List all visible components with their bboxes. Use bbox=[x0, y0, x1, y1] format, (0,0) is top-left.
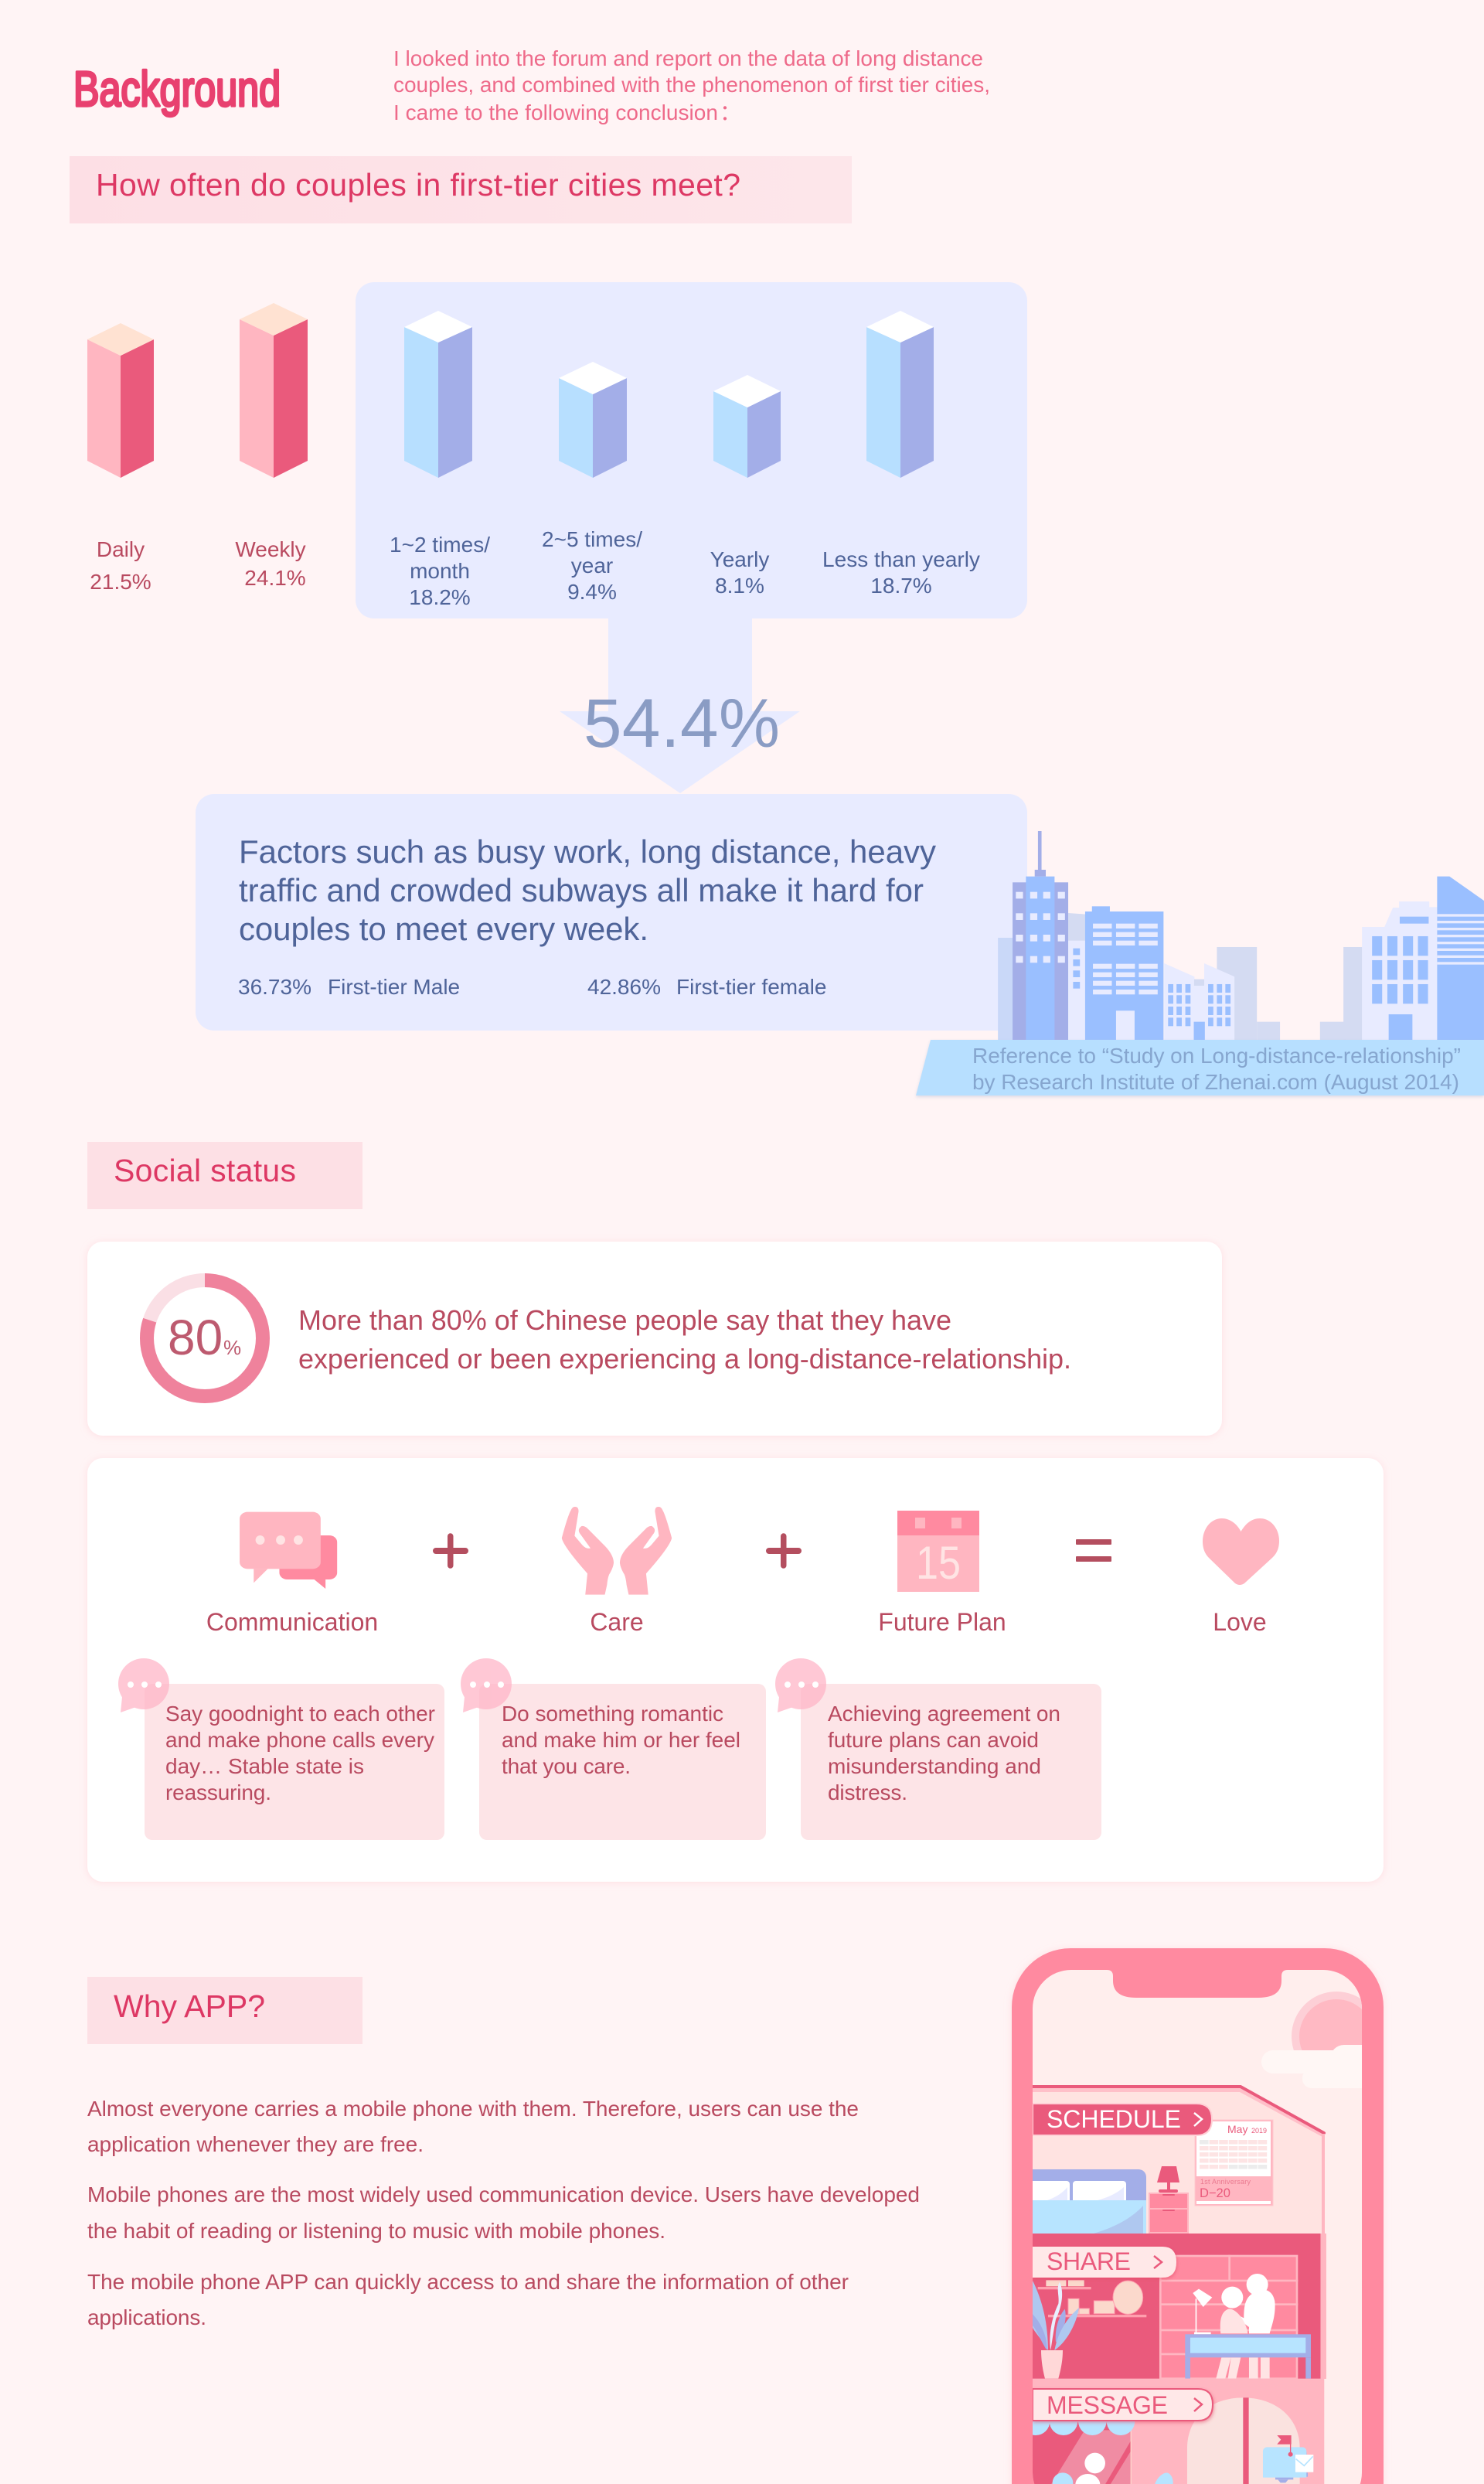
note: communication: reassuring. bbox=[165, 1780, 271, 1804]
bar: Less than yearly bbox=[866, 311, 934, 478]
bar labels: Daily bbox=[97, 537, 145, 561]
note: communication: Say goodnight to each other bbox=[165, 1702, 435, 1726]
shelves bbox=[1038, 2280, 1146, 2317]
desk lamp bbox=[1193, 2289, 1212, 2334]
heading: Why APP? bbox=[87, 1977, 362, 2044]
text block: why app reasons bbox=[87, 2097, 920, 2329]
donut chart: 80% bbox=[147, 1280, 263, 1396]
wall calendar: D−20 bbox=[1200, 2186, 1230, 2200]
label: MESSAGE: MESSAGE bbox=[1047, 2391, 1168, 2419]
label: SCHEDULE bbox=[1033, 2104, 1212, 2135]
gender stats: 36.73% bbox=[238, 975, 311, 999]
house first floor wall bbox=[1033, 2085, 1326, 2234]
window grid bbox=[1159, 2255, 1298, 2379]
note: care: that you care. bbox=[502, 1754, 631, 1778]
icon: plus bbox=[766, 1533, 802, 1569]
phone screen bbox=[1033, 1970, 1362, 2484]
illustration: phone bbox=[1012, 1948, 1395, 2484]
bar labels: 18.7% bbox=[870, 574, 932, 598]
formula labels: Future Plan bbox=[878, 1608, 1006, 1636]
label: SHARE bbox=[1033, 2247, 1176, 2278]
statement text bbox=[298, 1304, 1071, 1375]
bar: Daily bbox=[87, 323, 154, 478]
wall calendar bbox=[1195, 2120, 1273, 2206]
note: future plan: misunderstanding and bbox=[828, 1754, 1041, 1778]
formula labels bbox=[206, 1608, 1267, 1636]
formula labels: Communication bbox=[206, 1608, 378, 1636]
couple bbox=[1216, 2274, 1275, 2379]
intro text block: I looked into the forum and report on the data of long distance bbox=[393, 46, 983, 70]
bar labels: 21.5% bbox=[90, 570, 151, 594]
note: future plan: future plans can avoid bbox=[828, 1728, 1039, 1752]
lamp and nightstand bbox=[1149, 2166, 1188, 2233]
factors text: Factors such as busy work, long distance, heavy bbox=[239, 833, 936, 870]
icon: equals bbox=[1076, 1539, 1111, 1562]
heading: How often do couples meet: How often do couples in first-tier cities meet? bbox=[96, 167, 740, 203]
text block: why app reasons: the habit of reading or listening to music with mobile phones. bbox=[87, 2219, 665, 2243]
desk bbox=[1185, 2334, 1311, 2379]
calendar date grid bbox=[1200, 2140, 1267, 2169]
bar labels: month bbox=[410, 559, 470, 583]
bar: Weekly bbox=[240, 303, 308, 478]
reference strip bbox=[916, 1040, 1484, 1095]
panel: factors bbox=[196, 794, 1027, 1031]
formula labels: Love bbox=[1213, 1608, 1267, 1636]
icon: caring hands bbox=[562, 1507, 672, 1595]
note: care: and make him or her feel bbox=[502, 1728, 740, 1752]
bar chart: meeting frequency bbox=[87, 303, 934, 478]
statement text: experienced or been experiencing a long-distance-relationship. bbox=[298, 1343, 1071, 1375]
plant bbox=[1033, 2281, 1079, 2379]
wall calendar: 1st Anniversary bbox=[1200, 2178, 1251, 2186]
statement text: More than 80% of Chinese people say that they have bbox=[298, 1304, 951, 1336]
factors text: traffic and crowded subways all make it hard for bbox=[239, 872, 924, 908]
icon: plus bbox=[433, 1533, 468, 1569]
mailbox bbox=[1263, 2435, 1313, 2482]
heading: Why APP?: Why APP? bbox=[114, 1988, 265, 2024]
shop window with figure bbox=[1033, 2421, 1173, 2484]
sun and clouds bbox=[1261, 1992, 1362, 2088]
intro text block: couples, and combined with the phenomenon of first tier cities, bbox=[393, 73, 990, 97]
panel: love formula bbox=[87, 1458, 1384, 1882]
phone notch bbox=[1107, 1970, 1288, 1998]
bar: 2~5 times/year bbox=[559, 362, 627, 478]
note: communication: and make phone calls every bbox=[165, 1728, 434, 1752]
panel: blue frequency panel with arrow bbox=[356, 282, 1027, 793]
label: MESSAGE bbox=[1033, 2389, 1213, 2421]
bar labels: 2~5 times/ bbox=[542, 527, 642, 551]
wall calendar: May bbox=[1227, 2123, 1247, 2135]
text block: why app reasons: applications. bbox=[87, 2305, 206, 2329]
intro text block: I came to the following conclusion bbox=[393, 101, 718, 124]
factors text: couples to meet every week. bbox=[239, 911, 648, 947]
title: Background: Background bbox=[73, 61, 281, 117]
bar labels: 24.1% bbox=[244, 566, 306, 590]
donut chart: 80%: % bbox=[223, 1336, 241, 1359]
bar labels: Weekly bbox=[235, 537, 306, 561]
note: future plan: Achieving agreement on bbox=[828, 1702, 1060, 1726]
icon: calendar 15: 15 bbox=[916, 1537, 961, 1589]
intro text block bbox=[393, 46, 990, 124]
note: future plan bbox=[775, 1658, 1101, 1840]
panel: 80 percent card bbox=[87, 1242, 1222, 1436]
donut chart: 80%: 80 bbox=[168, 1310, 223, 1365]
bar: Yearly bbox=[713, 375, 781, 478]
text block: why app reasons: Almost everyone carries a mobile phone with them. Therefore, users can use the bbox=[87, 2097, 859, 2121]
heading: Social status: Social status bbox=[114, 1153, 296, 1188]
label: SCHEDULE: SCHEDULE bbox=[1047, 2105, 1181, 2133]
note: future plan: distress. bbox=[828, 1780, 907, 1804]
bar: 1~2 times/month bbox=[404, 311, 472, 478]
bar labels: 1~2 times/ bbox=[390, 533, 490, 557]
icon: heart bbox=[1203, 1518, 1279, 1585]
note: communication: day… Stable state is bbox=[165, 1754, 364, 1778]
heading: Social status bbox=[87, 1142, 362, 1209]
illustration: city skyline bbox=[998, 831, 1484, 1040]
bar labels: 18.2% bbox=[409, 585, 471, 609]
gender stats bbox=[238, 975, 826, 999]
factors text bbox=[239, 833, 936, 947]
bar labels: 8.1% bbox=[715, 574, 764, 598]
text block: why app reasons: Mobile phones are the most widely used communication device. Users have developed bbox=[87, 2182, 920, 2206]
bar labels bbox=[90, 527, 980, 609]
bar labels: Less than yearly bbox=[822, 547, 980, 571]
bar labels: year bbox=[571, 554, 613, 578]
gender stats: First-tier Male bbox=[328, 975, 460, 999]
note: care bbox=[461, 1658, 766, 1840]
gender stats: First-tier female bbox=[676, 975, 826, 999]
bar labels: 9.4% bbox=[567, 580, 617, 604]
second floor room bbox=[1033, 2234, 1326, 2379]
label: SHARE: SHARE bbox=[1047, 2247, 1131, 2275]
formula labels: Care bbox=[590, 1608, 644, 1636]
icon: chat bubbles bbox=[240, 1512, 337, 1589]
arched door bbox=[1187, 2397, 1300, 2484]
text block: why app reasons: The mobile phone APP can quickly access to and share the information of other bbox=[87, 2270, 849, 2294]
bar labels: Yearly bbox=[710, 547, 769, 571]
wall calendar: 2019 bbox=[1251, 2127, 1267, 2135]
reference strip: by Research Institute of Zhenai.com (August 2014) bbox=[972, 1070, 1459, 1094]
intro text block: ： bbox=[720, 101, 741, 124]
text block: why app reasons: application whenever they are free. bbox=[87, 2132, 424, 2156]
note: communication bbox=[118, 1658, 444, 1840]
icon: calendar 15 bbox=[897, 1511, 979, 1592]
bed bbox=[1033, 2169, 1146, 2234]
note: care: Do something romantic bbox=[502, 1702, 723, 1726]
reference strip: Reference to “Study on Long-distance-relationship” bbox=[972, 1044, 1461, 1068]
third floor room bbox=[1022, 2379, 1324, 2484]
big number 54.4%: 54.4% bbox=[584, 684, 780, 762]
gender stats: 42.86% bbox=[587, 975, 661, 999]
heading: How often do couples meet bbox=[70, 156, 852, 223]
